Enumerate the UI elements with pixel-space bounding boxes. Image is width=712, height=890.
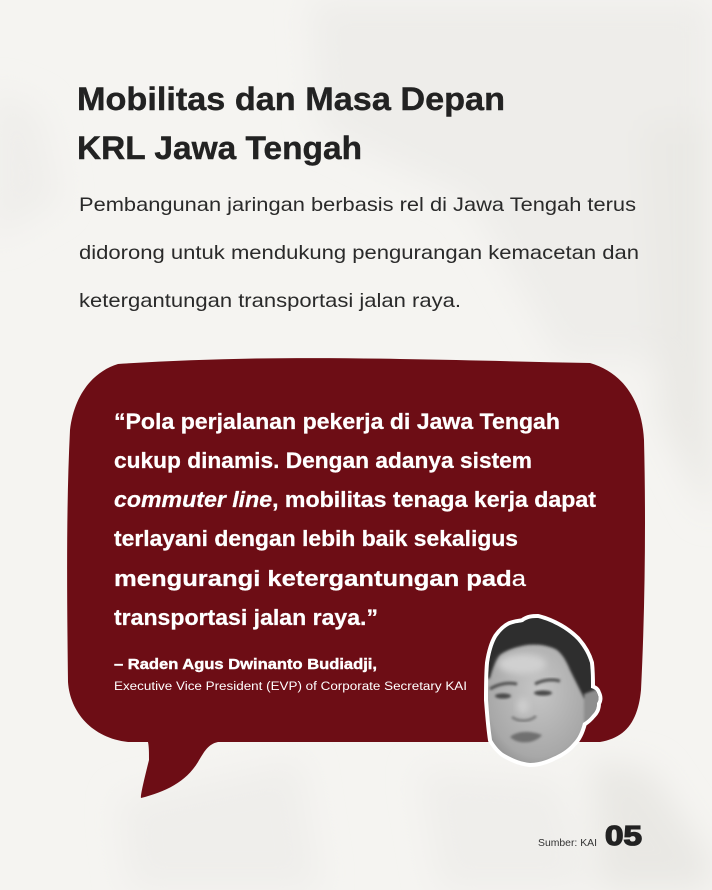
nose — [517, 698, 529, 714]
quote text: “Pola perjalanan pekerja di Jawa Tengah — [114, 409, 560, 434]
mouth — [510, 732, 542, 742]
quote text: mengurangi ketergantungan pad a — [114, 566, 527, 591]
intro paragraph: didorong untuk mendukung pengurangan kemacetan dan — [79, 242, 639, 264]
ear — [584, 688, 600, 724]
title — [77, 81, 505, 166]
page number: 05 — [605, 820, 642, 851]
attribution: – Raden Agus Dwinanto Budiadji, — [114, 657, 377, 673]
source note: Sumber: KAI — [538, 837, 597, 849]
title: KRL Jawa Tengah — [77, 130, 362, 166]
quote text: terlayani dengan lebih baik sekaligus — [114, 526, 518, 551]
quote text: transportasi jalan raya.” — [114, 605, 378, 630]
attribution — [114, 657, 467, 693]
quote text: commuter line , mobilitas tenaga kerja dapat — [114, 487, 597, 512]
intro paragraph — [79, 194, 639, 312]
hair — [488, 618, 598, 700]
quote text: cukup dinamis. Dengan adanya sistem — [114, 448, 532, 473]
attribution: Executive Vice President (EVP) of Corporate Secretary KAI — [114, 681, 467, 693]
panel: quote speech bubble — [67, 358, 645, 798]
intro paragraph: ketergantungan transportasi jalan raya. — [79, 290, 461, 312]
intro paragraph: Pembangunan jaringan berbasis rel di Jawa Tengah terus — [79, 194, 636, 216]
eyes — [495, 693, 511, 699]
quote text — [114, 409, 597, 630]
forehead highlight — [498, 654, 546, 674]
eyebrows — [490, 680, 560, 689]
title: Mobilitas dan Masa Depan — [77, 81, 505, 117]
portrait: Raden Agus Dwinanto Budiadji — [484, 612, 603, 767]
